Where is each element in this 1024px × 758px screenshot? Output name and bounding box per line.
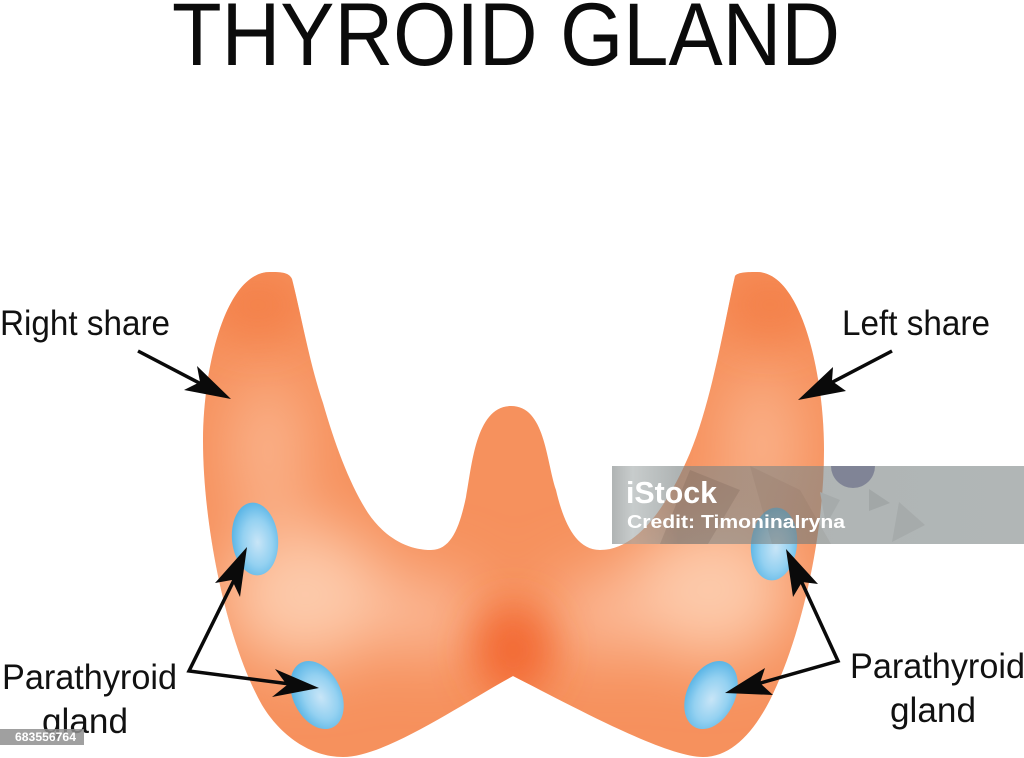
label: parathyroid gland left: Parathyroid [2, 658, 177, 697]
stock id tag [0, 729, 84, 745]
watermark brand: iStock [626, 475, 718, 510]
arrows: parathyroid left [189, 547, 319, 697]
watermark credit: Credit: TimoninaIryna [627, 512, 846, 532]
stock id tag: 683556764 [15, 730, 76, 744]
parathyroid gland: lower left [280, 652, 354, 738]
parathyroid gland: upper left [228, 500, 282, 578]
parathyroid gland: upper right [747, 505, 801, 583]
arrow: left share [798, 351, 892, 400]
watermark banner [612, 466, 1024, 544]
label: right share: Right share [0, 304, 170, 343]
label: left share: Left share [842, 304, 990, 343]
label: parathyroid gland right: gland [890, 691, 976, 730]
thyroid gland body [190, 260, 840, 758]
arrow: right share [138, 351, 231, 399]
label: parathyroid gland left: gland [42, 702, 128, 741]
parathyroid gland: lower right [674, 652, 748, 738]
arrows: parathyroid right [725, 549, 838, 695]
label: parathyroid gland right: Parathyroid [850, 647, 1024, 686]
